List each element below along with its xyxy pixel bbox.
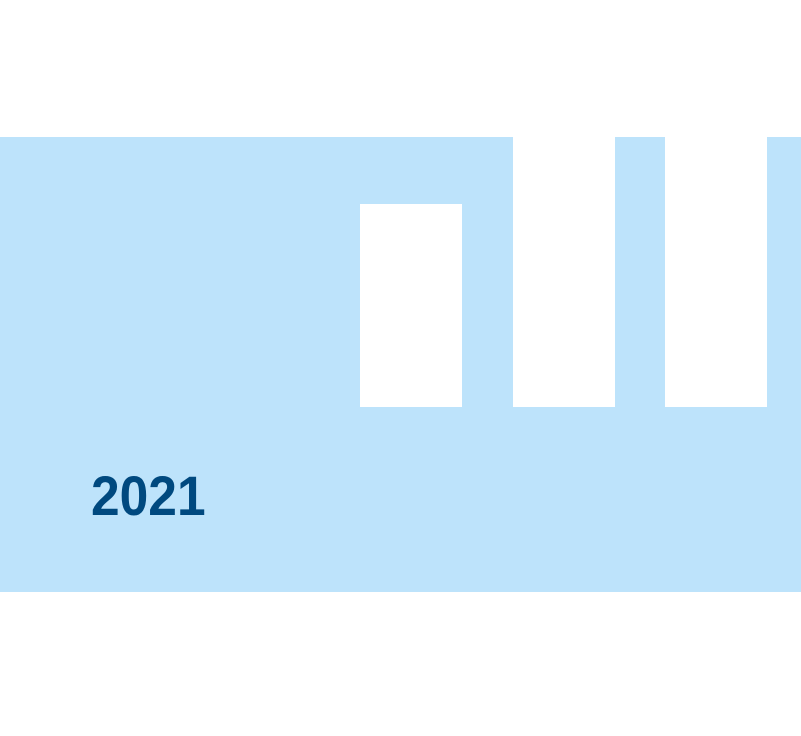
panel: light blue background band <box>0 137 801 592</box>
bar: tall white column right <box>665 137 767 407</box>
bar: tall white column middle <box>513 137 615 407</box>
bar: short white column <box>360 204 462 407</box>
year label: 2021 <box>91 464 206 527</box>
